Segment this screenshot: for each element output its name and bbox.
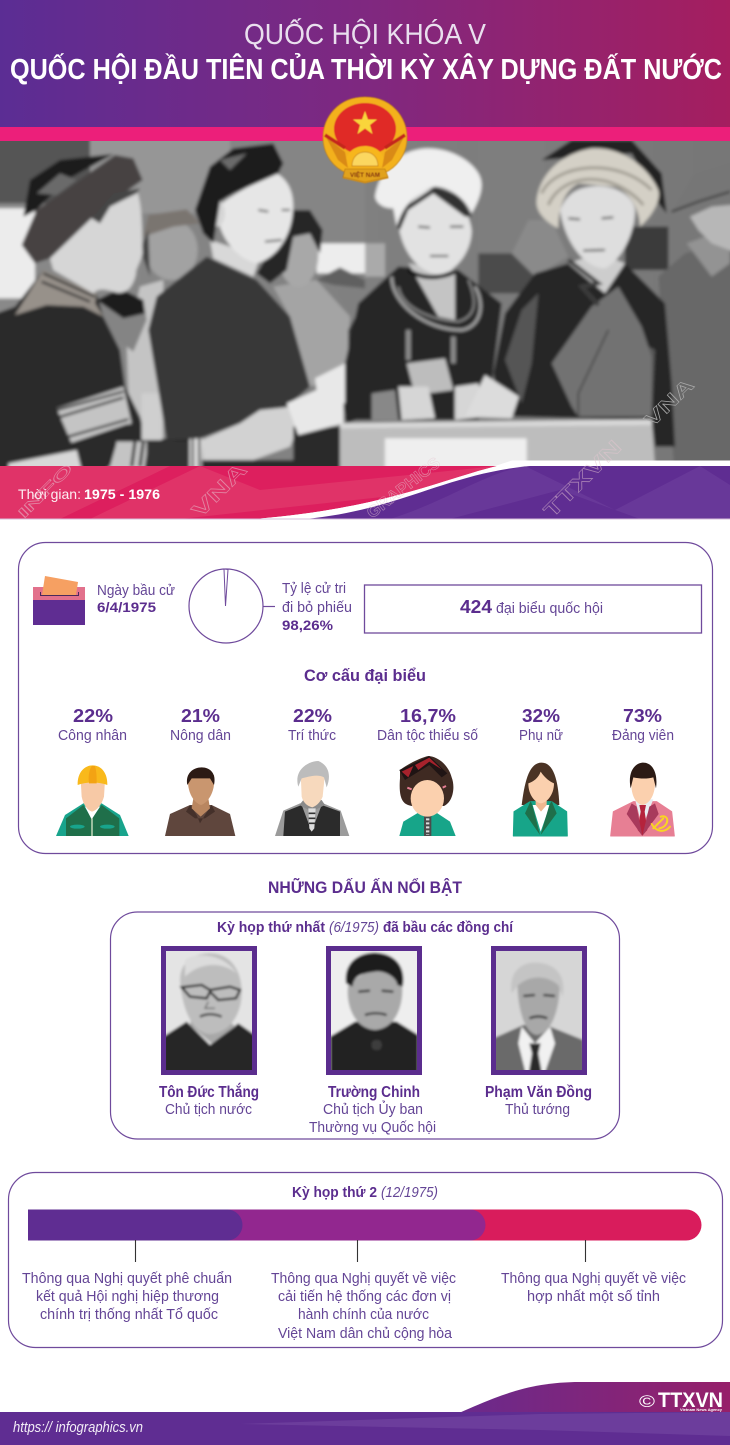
resolution 2 text (271, 1271, 456, 1342)
stat: party members: 73% (623, 705, 662, 726)
watermarks on ribbon: GRAPHICS (364, 454, 444, 522)
agency logo: © (639, 1392, 656, 1411)
agency logo: Vietnam News Agency (680, 1407, 723, 1412)
leader 3 caption: Thủ tướng (505, 1102, 570, 1118)
leader 2 caption: Trường Chinh (328, 1084, 420, 1101)
title line 1: QUỐC HỘI KHÓA V (244, 17, 487, 51)
stat: intellectuals (275, 705, 349, 836)
election date: 6/4/1975 (97, 599, 156, 615)
stat: women: Phụ nữ (519, 727, 563, 744)
leader 1 caption (159, 1083, 259, 1118)
leader 2 caption (309, 1084, 436, 1136)
stat: ethnic minorities: 16,7% (400, 705, 456, 726)
stat: farmers (165, 705, 235, 836)
photo: ethnic minority women casting ballots (0, 141, 730, 467)
header banner (0, 0, 730, 127)
connector lines (136, 1240, 586, 1262)
portrait: Tôn Đức Thắng (160, 946, 257, 1077)
source url: https:// infographics.vn (13, 1419, 143, 1436)
portrait: Phạm Văn Đồng (490, 946, 588, 1077)
watermarks on ribbon: VNA (188, 459, 252, 523)
stat: farmers: Nông dân (170, 727, 231, 744)
turnout text: Tỷ lệ cử tri (282, 581, 346, 597)
second session heading: Kỳ họp thứ 2 (292, 1185, 377, 1201)
portrait: Trường Chinh (326, 946, 423, 1077)
heading: delegate structure: Cơ cấu đại biểu (304, 667, 426, 685)
turnout text: đi bỏ phiếu (282, 600, 352, 616)
timeline bar (28, 1210, 702, 1240)
panel: second session (8, 1172, 722, 1348)
leader 2 caption: Thường vụ Quốc hội (309, 1120, 436, 1136)
panel: first session (110, 912, 620, 1139)
callout: 424 delegates: đại biểu quốc hội (496, 600, 603, 617)
stat: party members: Đảng viên (612, 727, 674, 744)
icon: ethnic minority woman (399, 756, 456, 836)
icon: woman (513, 763, 567, 836)
pie chart: turnout 98.26% (189, 569, 275, 643)
second session heading: (12/1975) (381, 1185, 438, 1201)
turnout text: 98,26% (282, 617, 334, 633)
resolution 1 text: kết quả Hội nghị hiệp thương (36, 1289, 219, 1305)
icon: national emblem of Vietnam (323, 97, 407, 183)
stat: ethnic minorities (377, 705, 479, 836)
resolution 1 text: Thông qua Nghị quyết phê chuẩn (22, 1271, 232, 1287)
stat: workers (56, 705, 129, 836)
bottom photo ribbon (0, 436, 730, 523)
stat: women: 32% (522, 705, 560, 726)
leader 3 caption (485, 1084, 592, 1118)
resolution 3 text: Thông qua Nghị quyết về việc (501, 1271, 686, 1287)
watermarks on ribbon: TTXVN (540, 436, 626, 523)
watermarks on ribbon: INFO (15, 460, 76, 521)
leader 2 caption: Chủ tịch Ủy ban (323, 1100, 423, 1118)
watermark on photo: VNA (641, 375, 699, 432)
stat: party members (611, 705, 674, 836)
time period label (18, 486, 160, 502)
resolution 1 text: chính trị thống nhất Tổ quốc (40, 1307, 218, 1323)
icon: intellectual (275, 761, 349, 836)
stat: workers: Công nhân (58, 727, 127, 744)
resolution 2 text: Việt Nam dân chủ cộng hòa (278, 1326, 453, 1342)
leader 1 caption: Chủ tịch nước (165, 1102, 252, 1118)
resolution 3 text (501, 1271, 686, 1305)
watermarks on ribbon (15, 436, 626, 523)
icon: ballot box (33, 576, 85, 625)
resolution 2 text: hành chính của nước (298, 1307, 429, 1323)
footer (0, 1382, 730, 1445)
stat: intellectuals: Trí thức (288, 727, 336, 744)
time period label: 1975 - 1976 (84, 486, 160, 502)
election date: Ngày bầu cử (97, 583, 175, 599)
icon: national emblem of Vietnam: VIỆT NAM (350, 171, 380, 179)
pink stripe (0, 127, 730, 141)
second session heading (292, 1185, 438, 1201)
agency logo: TTXVN (658, 1389, 723, 1412)
icon: party member (611, 763, 674, 836)
leader 1 caption: Tôn Đức Thắng (159, 1083, 259, 1101)
stat: workers: 22% (73, 705, 113, 726)
stat: intellectuals: 22% (293, 705, 332, 726)
turnout text (282, 581, 352, 633)
stat: ethnic minorities: Dân tộc thiểu số (377, 727, 479, 744)
stat: farmers: 21% (181, 705, 220, 726)
resolution 3 text: hợp nhất một số tỉnh (527, 1289, 660, 1305)
icon: farmer (165, 767, 235, 836)
time period label: Thời gian: (18, 486, 81, 502)
election date (97, 583, 175, 615)
first session heading: Kỳ họp thứ nhất (217, 920, 325, 936)
stat: women (513, 705, 567, 836)
callout: 424 delegates: 424 (460, 596, 493, 617)
callout: 424 delegates (364, 585, 702, 633)
icon: worker (56, 765, 129, 836)
resolution 2 text: Thông qua Nghị quyết về việc (271, 1271, 456, 1287)
first session heading (217, 920, 514, 936)
leader 3 caption: Phạm Văn Đồng (485, 1084, 592, 1101)
panel: election stats and delegate structure (18, 542, 712, 854)
resolution 1 text (22, 1271, 232, 1323)
first session heading: đã bầu các đồng chí (383, 920, 514, 936)
resolution 2 text: cải tiến hệ thống các đơn vị (278, 1289, 451, 1305)
heading: notable marks: NHỮNG DẤU ẤN NỔI BẬT (268, 877, 463, 897)
first session heading: (6/1975) (329, 920, 379, 936)
